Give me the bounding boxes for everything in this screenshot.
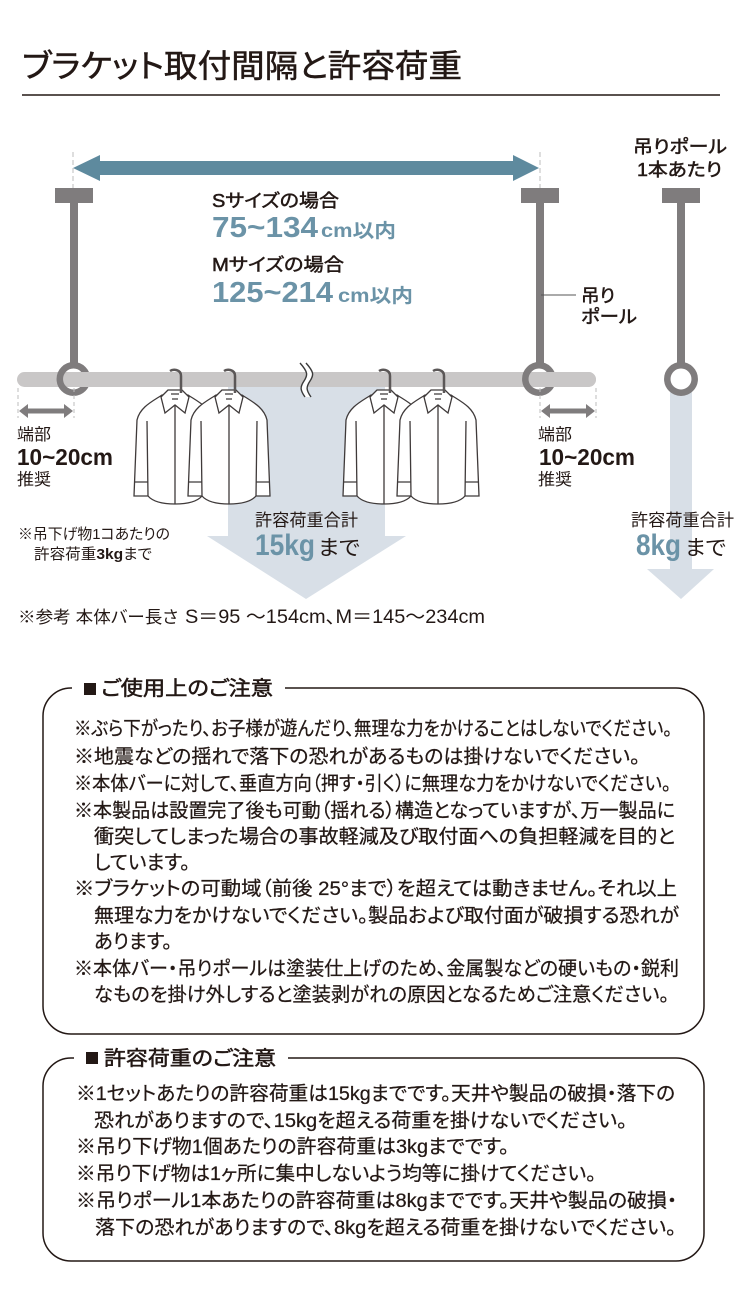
15kg load label: 許容荷重合計 (255, 511, 358, 530)
shirt 3 (343, 370, 425, 504)
left hanging pole (55, 188, 93, 365)
right end note: 推奨 (538, 470, 572, 489)
per-item load note (18, 526, 170, 563)
left end note: 10~20cm (17, 444, 113, 470)
right end note: 端部 (538, 425, 572, 444)
caution lines: ※吊りポール1本あたりの許容荷重は8kgまでです。天井や製品の破損・ (76, 1190, 677, 1212)
left end note (17, 425, 113, 489)
panel: load cautions (43, 1047, 704, 1261)
heading: 許容荷重のご注意 (104, 1047, 276, 1070)
8kg load label: 8kg (636, 529, 681, 562)
reference bar length note: ※参考 本体バー長さ (18, 608, 178, 627)
S size range (212, 212, 396, 244)
15kg load label: 15kg (255, 529, 315, 562)
per-item load note: ※吊下げ物1コあたりの (18, 526, 170, 543)
caution lines (76, 1083, 677, 1239)
caution lines (74, 718, 679, 1006)
right end note (538, 425, 635, 489)
caution lines: ※吊り下げ物は1ヶ所に集中しないよう均等に掛けてください。 (76, 1163, 596, 1185)
caution lines: ※1セットあたりの許容荷重は15kgまでです。天井や製品の破損・落下の (76, 1083, 675, 1105)
pole label with leader (541, 286, 637, 327)
caution lines: あります。 (94, 931, 172, 953)
title: ブラケット取付間隔と許容荷重 (22, 48, 462, 84)
caution lines: ※本体バー・吊りポールは塗装仕上げのため、金属製などの硬いもの・鋭利 (74, 958, 679, 980)
M size label: Mサイズの場合 (212, 255, 344, 275)
left end arrow (18, 388, 74, 418)
left end note: 推奨 (17, 470, 51, 489)
single pole heading (633, 137, 727, 180)
8kg load label: 許容荷重合計 (631, 511, 734, 530)
caution lines: ※吊り下げ物1個あたりの許容荷重は3kgまでです。 (76, 1136, 509, 1158)
caution lines: 無理な力をかけないでください。製品および取付面が破損する恐れが (94, 905, 679, 927)
width arrow (73, 155, 539, 181)
M size range (212, 277, 413, 309)
caution lines: 恐れがありますので、15kgを超える荷重を掛けないでください。 (94, 1110, 627, 1132)
S size label: Sサイズの場合 (212, 191, 339, 211)
pole label with leader: ポール (581, 307, 637, 327)
pole label with leader: 吊り (581, 286, 615, 306)
caution lines: 衝突してしまった場合の事故軽減及び取付面への負担軽減を目的と (94, 826, 675, 848)
M size range: cm以内 (338, 285, 413, 307)
reference bar length note (18, 607, 485, 628)
8kg load label (631, 511, 734, 562)
caution lines: なものを掛け外しすると塗装剥がれの原因となるためご注意ください。 (94, 984, 669, 1006)
panel: usage cautions (43, 677, 704, 1034)
load arrow: single pole 8kg (647, 392, 714, 599)
right end note: 10~20cm (539, 444, 635, 470)
load arrow: centre 15kg (207, 387, 406, 599)
main bar with brackets (17, 365, 596, 393)
shirt 4 (397, 370, 479, 504)
caution lines: ※ぶら下がったり、お子様が遊んだり、無理な力をかけることはしないでください。 (74, 718, 672, 740)
shirt 2 (188, 370, 270, 504)
caution lines: 落下の恐れがありますので、8kgを超える荷重を掛けないでください。 (95, 1217, 676, 1239)
shirt 1 (134, 370, 216, 504)
M size range: 125~214 (212, 277, 333, 309)
per-item load note: 許容荷重3kgまで (34, 546, 152, 563)
caution lines: ※本製品は設置完了後も可動（揺れる）構造となっていますが、万一製品に (74, 800, 675, 822)
15kg load label (255, 511, 360, 562)
break mark (300, 363, 313, 397)
reference bar length note: S＝95 ～154cm、M＝145～234cm (185, 607, 485, 628)
S size range: 75~134 (212, 212, 318, 244)
single hanging pole with ring (662, 188, 700, 393)
left end note: 端部 (17, 425, 51, 444)
heading: ご使用上のご注意 (101, 677, 273, 700)
15kg load label: まで (318, 537, 360, 560)
caution lines: しています。 (94, 852, 190, 874)
S size range: cm以内 (321, 220, 396, 242)
caution lines: ※本体バーに対して、垂直方向（押す・引く）に無理な力をかけないでください。 (74, 773, 671, 795)
right hanging pole (521, 188, 559, 365)
caution lines: ※地震などの揺れで落下の恐れがあるものは掛けないでください。 (74, 746, 640, 768)
single pole heading: 1本あたり (637, 160, 722, 180)
right end arrow (540, 388, 596, 418)
single pole heading: 吊りポール (633, 137, 727, 157)
8kg load label: まで (685, 537, 726, 560)
caution lines: ※ブラケットの可動域（前後 25°まで）を超えては動きません。それ以上 (74, 877, 677, 900)
